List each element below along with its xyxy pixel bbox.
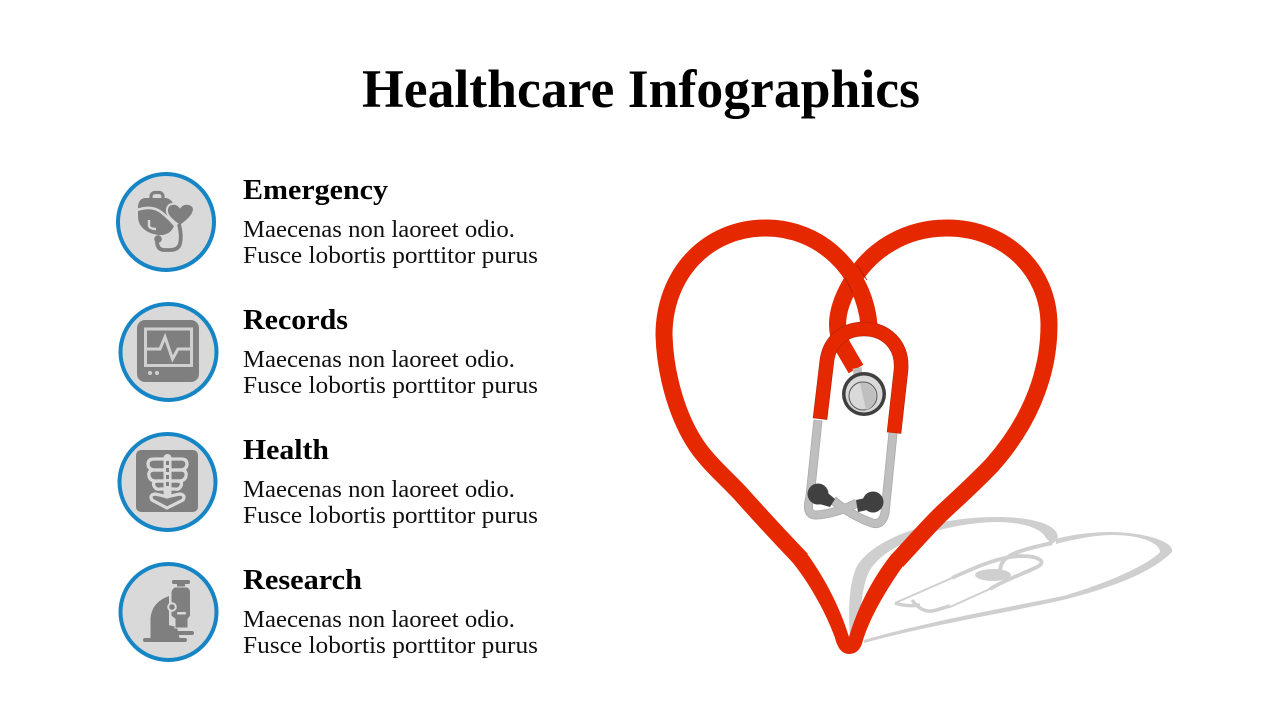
ear tubes	[808, 420, 893, 524]
red tubing heart	[664, 228, 1049, 561]
illustration: stethoscope heart	[664, 228, 1049, 654]
title: Healthcare Infographics	[362, 59, 920, 119]
illustration: stethoscope shadow	[849, 517, 1172, 643]
icon: emergency blood bag and heart	[118, 174, 214, 270]
text block: research description: Maecenas non laoreet odio.	[243, 606, 515, 633]
text block: records description: Maecenas non laoreet odio.	[243, 346, 515, 373]
text block: records description: Fusce lobortis porttitor purus	[243, 372, 538, 399]
text block: health description: Maecenas non laoreet odio.	[243, 476, 515, 503]
panel: health	[120, 434, 538, 530]
binaural arch	[820, 329, 901, 433]
heart bottom tip	[786, 555, 911, 654]
icon: health x-ray	[120, 434, 216, 530]
heading: Research: Research	[243, 564, 362, 596]
text block: research description: Fusce lobortis porttitor purus	[243, 632, 538, 659]
panel: emergency	[118, 174, 538, 270]
icon: research microscope	[120, 564, 216, 660]
chest piece	[842, 367, 886, 416]
icon: records monitor	[120, 304, 216, 400]
panel: records	[120, 304, 538, 400]
heading: Records: Records	[243, 304, 348, 336]
text block: emergency description: Maecenas non laoreet odio.	[243, 216, 515, 243]
heading: Health: Health	[243, 434, 329, 466]
panel: research	[120, 564, 538, 660]
text block: emergency description: Fusce lobortis porttitor purus	[243, 242, 538, 269]
earpieces	[808, 484, 884, 512]
text block: health description: Fusce lobortis porttitor purus	[243, 502, 538, 529]
heading: Emergency: Emergency	[243, 174, 389, 206]
